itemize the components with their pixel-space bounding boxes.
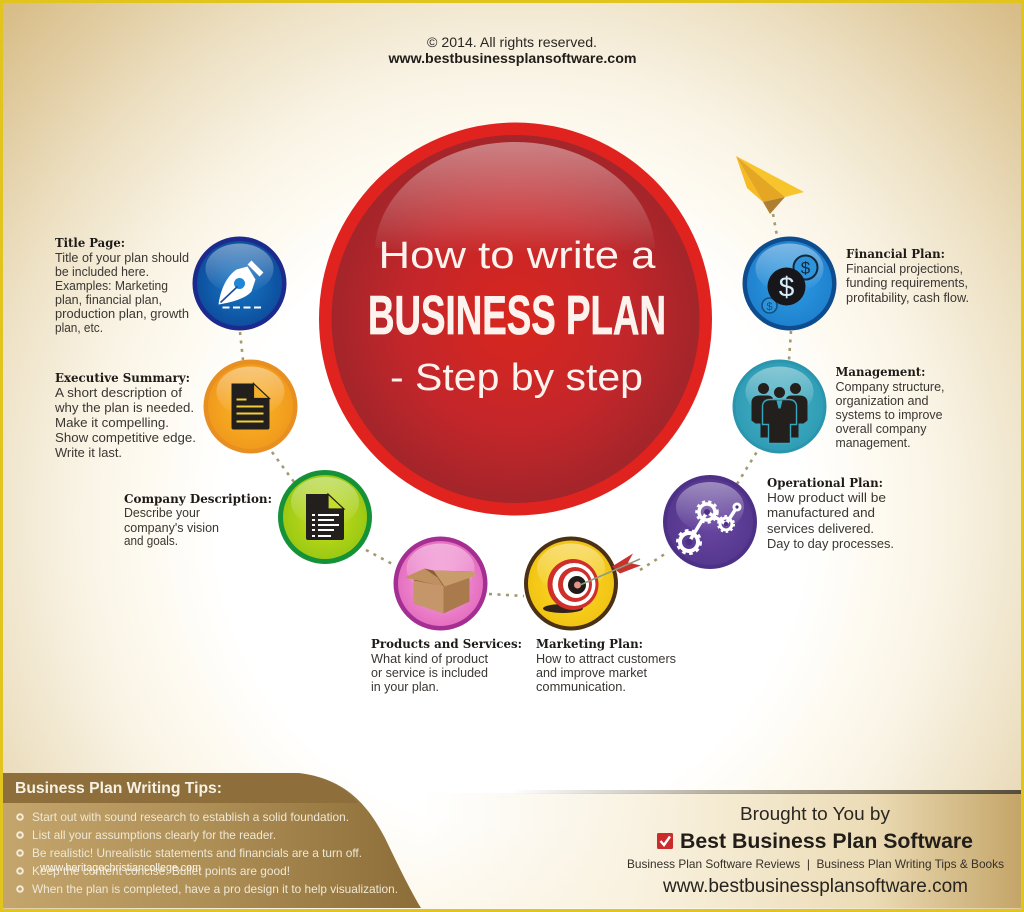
step: management: [732, 360, 944, 454]
text: financial plan: Financial projections,: [846, 262, 963, 276]
text: title page: Examples: Marketing: [55, 279, 168, 293]
step: marketing plan: [524, 536, 676, 694]
text: company description: Company Description:: [124, 492, 272, 506]
text: operational plan: Day to day processes.: [767, 537, 894, 551]
panel: writing tips: [3, 773, 421, 908]
icon: document: [204, 360, 298, 454]
text: executive summary: Make it compelling.: [55, 416, 169, 430]
icon: gears: [663, 475, 757, 569]
icon: cardboard box: [394, 536, 488, 630]
text: products and services: [371, 637, 522, 694]
text: company description: company's vision: [124, 521, 219, 535]
bullet list: When the plan is completed, have a pro design it to help visualization.: [32, 882, 398, 896]
icon: dollar coins: $: [766, 301, 773, 313]
step: financial plan: [742, 236, 969, 330]
icon: list document: [278, 470, 372, 564]
bullet list: Keep the content concise. Bullet points are good!: [32, 864, 290, 878]
text: marketing plan: How to attract customers: [536, 652, 676, 666]
text: financial plan: [846, 247, 969, 305]
title text: How to write a: [378, 235, 656, 277]
text: management: Company structure,: [836, 380, 944, 394]
panel: writing tips: Business Plan Writing Tips:: [15, 780, 222, 797]
text: company description: [124, 492, 272, 548]
text: products and services: or service is included: [371, 666, 488, 680]
copyright header: [387, 34, 636, 66]
text: executive summary: [54, 371, 196, 460]
text: title page: Title of your plan should: [55, 251, 189, 265]
step: products and services: [371, 536, 522, 694]
panel: brought to you by: Best Business Plan Software: [680, 830, 973, 853]
text: operational plan: Operational Plan:: [767, 476, 883, 490]
panel: brought to you by: www.bestbusinessplansoftware.com: [662, 876, 968, 897]
icon: dollar coins: $: [779, 272, 795, 302]
icon: team of people: [732, 360, 826, 454]
bullet list: List all your assumptions clearly for the reader.: [32, 828, 276, 842]
copyright header: © 2014. All rights reserved.: [427, 34, 597, 50]
bullet list: Be realistic! Unrealistic statements and financials are a turn off.: [32, 846, 362, 860]
step: operational plan: [663, 475, 894, 569]
bullet list: Start out with sound research to establish a solid foundation.: [32, 810, 349, 824]
icon: dollar coins: [742, 236, 836, 330]
text: marketing plan: communication.: [536, 680, 626, 694]
text: financial plan: profitability, cash flow.: [846, 291, 969, 305]
text: management: management.: [836, 436, 910, 450]
icon: paper plane: [736, 156, 804, 214]
text: title page: be included here.: [55, 265, 149, 279]
text: executive summary: Show competitive edge.: [55, 431, 196, 445]
text: title page: plan, financial plan,: [55, 293, 162, 307]
panel: brought to you by: Brought to You by: [740, 804, 890, 824]
step: company description: [124, 470, 372, 564]
icon: dollar coins: $: [801, 258, 811, 278]
watermark: www.heritagechristiancollege.com: [39, 862, 201, 874]
gloss highlight: [375, 142, 655, 255]
step: title page: [55, 236, 286, 335]
text: title page: Title Page:: [55, 236, 125, 250]
text: operational plan: manufactured and: [767, 506, 875, 520]
text: executive summary: why the plan is needed.: [54, 401, 194, 415]
title text: - Step by step: [390, 357, 643, 399]
step: executive summary: [54, 360, 297, 460]
text: title page: plan, etc.: [55, 321, 103, 335]
text: marketing plan: Marketing Plan:: [536, 637, 643, 651]
connector: dotted path between steps: [240, 214, 791, 596]
text: products and services: in your plan.: [371, 680, 439, 694]
text: management: organization and: [836, 394, 928, 408]
text: management: systems to improve: [836, 408, 942, 422]
text: financial plan: funding requirements,: [846, 276, 968, 290]
text: executive summary: Write it last.: [55, 446, 122, 460]
text: operational plan: How product will be: [767, 491, 886, 505]
text: management: [836, 365, 944, 450]
text: company description: and goals.: [124, 534, 178, 548]
title text: [368, 235, 666, 399]
text: operational plan: services delivered.: [767, 522, 874, 536]
icon: target with arrow: [524, 536, 641, 630]
panel: brought to you by: [421, 790, 1021, 908]
text: operational plan: [767, 476, 894, 551]
title text: BUSINESS PLAN: [368, 284, 666, 346]
text: executive summary: A short description of: [55, 386, 183, 400]
text: marketing plan: and improve market: [536, 666, 647, 680]
text: title page: [55, 236, 189, 335]
text: products and services: Products and Services:: [371, 637, 522, 651]
icon: red checkbox: [657, 833, 673, 849]
text: management: overall company: [836, 422, 927, 436]
text: products and services: What kind of product: [371, 652, 488, 666]
bullet list: [17, 810, 398, 896]
text: title page: production plan, growth: [55, 307, 189, 321]
text: marketing plan: [536, 637, 676, 694]
text: financial plan: Financial Plan:: [846, 247, 945, 261]
central title circle: [319, 122, 712, 516]
text: company description: Describe your: [124, 506, 200, 520]
text: management: Management:: [836, 365, 926, 379]
text: executive summary: Executive Summary:: [55, 371, 190, 385]
icon: pen nib: [192, 236, 286, 330]
heading band: [3, 773, 358, 803]
panel: brought to you by: Business Plan Software Reviews | Business Plan Writing Tips & Books: [627, 857, 1004, 871]
copyright header: www.bestbusinessplansoftware.com: [387, 51, 636, 66]
